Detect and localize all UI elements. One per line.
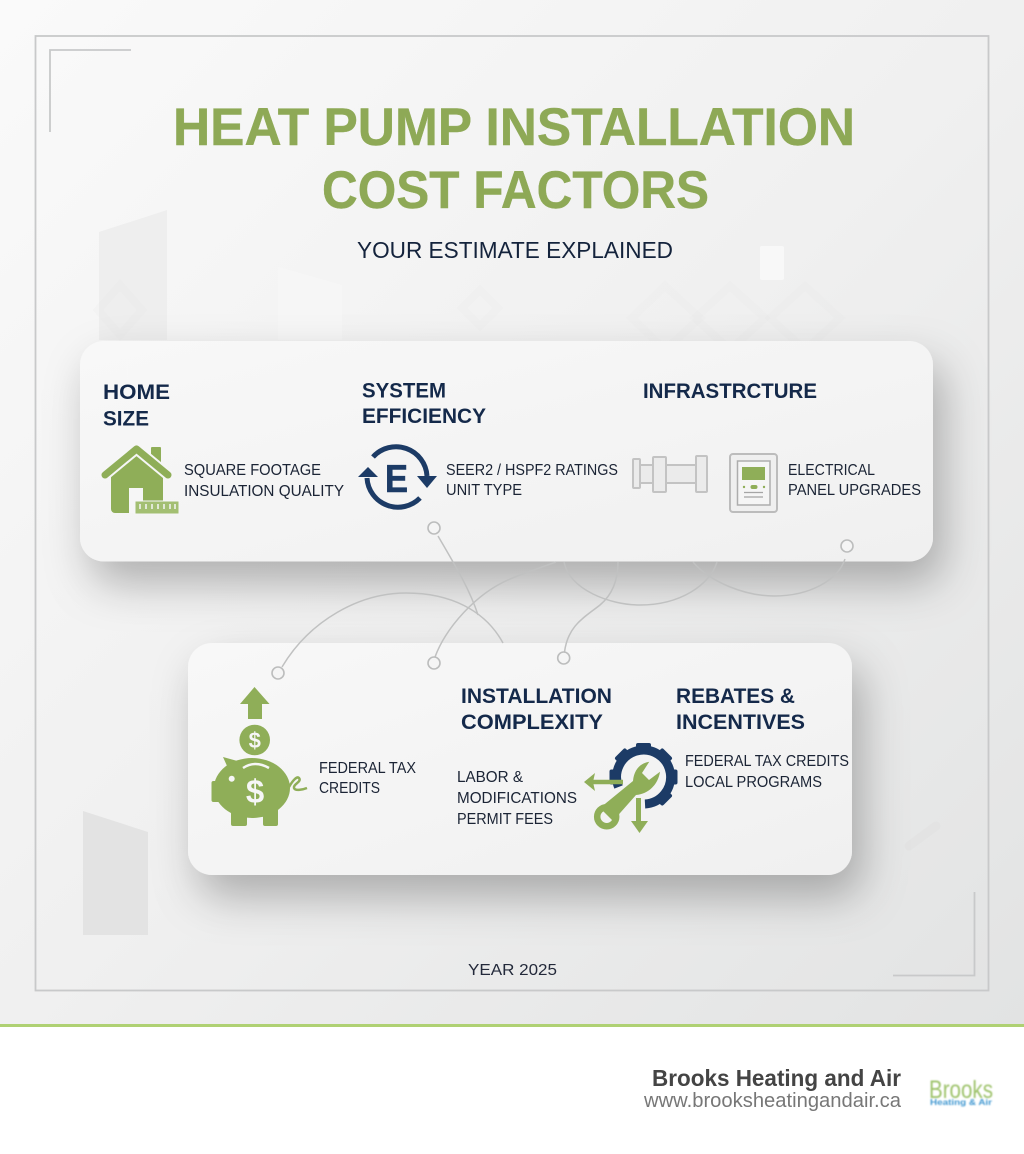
footer website: www.brooksheatingandair.ca xyxy=(643,1090,902,1112)
logo: Heating & Air xyxy=(930,1098,992,1107)
background shapes xyxy=(83,210,936,935)
heading: installation complexity xyxy=(461,684,612,734)
icon: piggy bank: $ xyxy=(246,773,264,810)
icon: efficiency cycle xyxy=(358,447,437,507)
corner bracket bottom-right xyxy=(893,892,974,976)
text: installation details: PERMIT FEES xyxy=(457,811,553,828)
text: electrical details: PANEL UPGRADES xyxy=(788,482,921,499)
subtitle: YOUR ESTIMATE EXPLAINED xyxy=(357,237,673,263)
text: efficiency details: UNIT TYPE xyxy=(446,482,522,499)
text: installation details xyxy=(457,769,577,828)
footer background xyxy=(0,1027,1024,1154)
icon: piggy bank xyxy=(212,687,307,826)
text: installation details: LABOR & xyxy=(457,769,523,786)
icon: gear and wrench xyxy=(584,743,678,833)
heading: installation complexity: INSTALLATION xyxy=(461,684,612,708)
logo: Brooks xyxy=(929,1076,993,1104)
text: electrical details: ELECTRICAL xyxy=(788,462,875,479)
title: COST FACTORS xyxy=(322,161,709,220)
text: efficiency details: SEER2 / HSPF2 RATINGS xyxy=(446,462,618,479)
heading: system efficiency xyxy=(362,378,486,428)
corner bracket top-left xyxy=(50,50,131,132)
heading: system efficiency: EFFICIENCY xyxy=(362,404,486,428)
text: home size details xyxy=(184,462,344,500)
panel: top factors xyxy=(80,341,933,562)
year label: YEAR 2025 xyxy=(468,962,557,979)
heading: home size: HOME xyxy=(103,380,170,404)
icon: electrical panel xyxy=(730,454,777,512)
panel: bottom factors xyxy=(188,643,852,875)
footer company name: Brooks Heating and Air xyxy=(652,1065,901,1091)
text: federal credits: CREDITS xyxy=(319,780,380,797)
heading: home size: SIZE xyxy=(103,406,149,430)
heading: infrastructure: INFRASTRCTURE xyxy=(643,379,817,403)
text: home size details: SQUARE FOOTAGE xyxy=(184,462,321,479)
outer frame xyxy=(36,36,988,990)
icon: efficiency cycle: E xyxy=(385,458,408,501)
heading: rebates and incentives xyxy=(676,684,805,734)
heading: home size xyxy=(103,380,170,430)
heading: installation complexity: COMPLEXITY xyxy=(461,710,603,734)
icon: house with ruler xyxy=(105,447,179,514)
connector lines xyxy=(272,522,853,679)
text: home size details: INSULATION QUALITY xyxy=(184,483,344,500)
text: rebate details: LOCAL PROGRAMS xyxy=(685,774,822,791)
title: HEAT PUMP INSTALLATION xyxy=(173,98,855,157)
text: federal credits xyxy=(319,760,416,797)
heading: rebates and incentives: REBATES & xyxy=(676,684,795,708)
text: electrical details xyxy=(788,462,921,499)
footer accent line xyxy=(0,1024,1024,1027)
heading: rebates and incentives: INCENTIVES xyxy=(676,710,805,734)
text: rebate details: FEDERAL TAX CREDITS xyxy=(685,753,849,770)
text: rebate details xyxy=(685,753,849,791)
icon: piggy bank: $ xyxy=(249,728,261,753)
text: installation details: MODIFICATIONS xyxy=(457,790,577,807)
text: efficiency details xyxy=(446,462,618,499)
icon: pipe xyxy=(633,456,707,492)
text: federal credits: FEDERAL TAX xyxy=(319,760,416,777)
heading: system efficiency: SYSTEM xyxy=(362,378,446,402)
title xyxy=(173,98,855,220)
